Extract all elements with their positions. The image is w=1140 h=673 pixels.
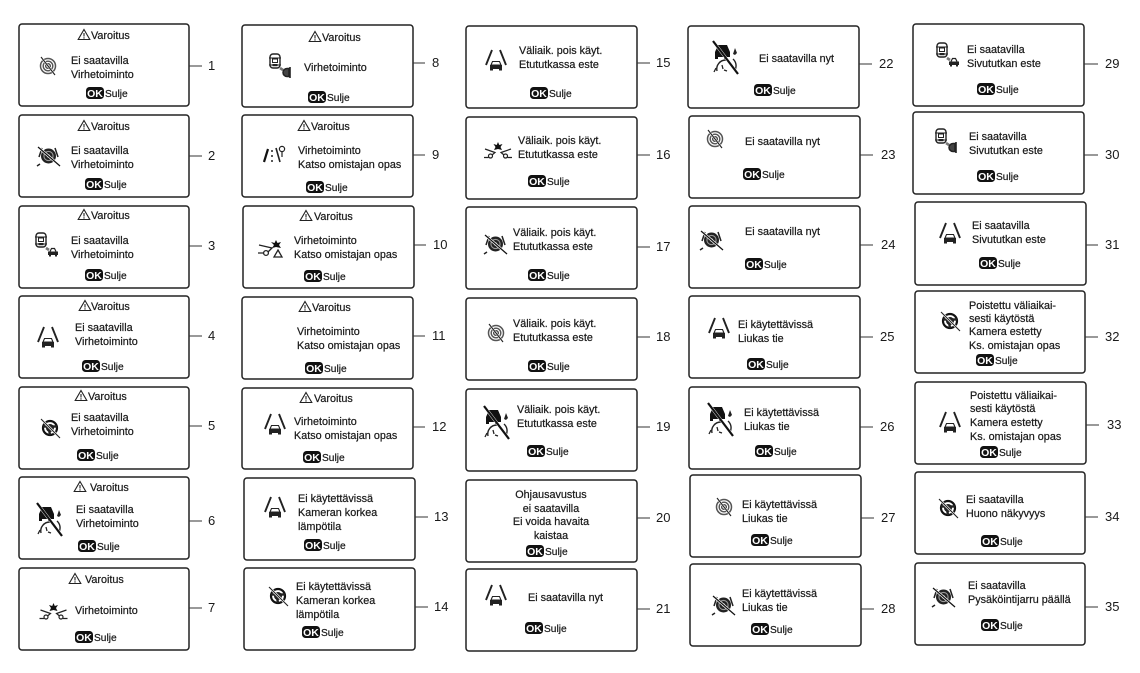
heading: Varoitus: [312, 302, 351, 314]
message: Virhetoiminto: [294, 235, 357, 247]
icon: radar crossed: [716, 498, 732, 516]
message: Liukas tie: [738, 333, 784, 345]
warning panel 30: [913, 112, 1119, 194]
warning panel 8: [242, 25, 439, 107]
warning panel 6: [19, 477, 215, 559]
icon: wheel radar crossed: [712, 596, 735, 615]
number: 31: [1105, 237, 1119, 252]
icon: lane car: [486, 585, 506, 606]
OK button: Sulje: [764, 260, 787, 271]
message: Poistettu väliaikai-: [969, 300, 1056, 312]
OK button: [977, 170, 1019, 183]
warning panel 33: [915, 382, 1121, 464]
warning panel 31: [915, 202, 1119, 285]
message: Virhetoiminto: [297, 326, 360, 338]
icon: steering wheel crossed: [939, 499, 958, 518]
OK button: [85, 178, 127, 191]
message: Liukas tie: [742, 513, 788, 525]
number: 16: [656, 147, 670, 162]
warning panel 22: [688, 26, 893, 108]
warning panel 1: [19, 24, 215, 106]
message: ei saatavilla: [523, 503, 579, 515]
heading: Varoitus: [85, 574, 124, 586]
message: sesti käytöstä: [969, 313, 1034, 325]
message: Ei saatavilla: [71, 235, 129, 247]
OK button: [747, 358, 789, 371]
warning panel 24: [689, 206, 895, 288]
message: Kamera estetty: [969, 326, 1042, 338]
warning panel 7: [19, 568, 215, 650]
OK button: [86, 87, 128, 100]
message: Ei voida havaita: [513, 516, 589, 528]
warning panel 18: [466, 298, 670, 380]
icon: wheel radar crossed: [700, 231, 723, 250]
warning panel 10: [243, 206, 447, 288]
message: Virhetoiminto: [298, 145, 361, 157]
message: Ei saatavilla: [71, 412, 129, 424]
icon: collision: [484, 142, 512, 158]
message: Ei käytettävissä: [742, 499, 817, 511]
icon: collision and triangle: [258, 240, 282, 257]
message: Väliaik. pois käyt.: [513, 227, 596, 239]
OK button: Sulje: [544, 624, 567, 635]
message: kaistaa: [534, 530, 568, 542]
warning panel 5: [19, 387, 215, 469]
OK button: [751, 623, 793, 636]
OK button: [745, 258, 787, 271]
message: Ei saatavilla: [966, 494, 1024, 506]
warning panel 17: [466, 207, 670, 289]
number: 5: [208, 418, 215, 433]
message: Kameran korkea: [298, 507, 377, 519]
message: Ei saatavilla: [71, 55, 129, 67]
heading: Varoitus: [91, 301, 130, 313]
number: 29: [1105, 56, 1119, 71]
number: 21: [656, 601, 670, 616]
message: Liukas tie: [744, 421, 790, 433]
message: Väliaik. pois käyt.: [519, 45, 602, 57]
message: Virhetoiminto: [71, 69, 134, 81]
OK button: Sulje: [996, 85, 1019, 96]
icon: wheel radar crossed: [37, 147, 60, 166]
warning panel 2: [19, 115, 215, 197]
heading: Varoitus: [311, 121, 350, 133]
icon: radar car and lamp: [269, 54, 290, 78]
OK button: Sulje: [998, 259, 1021, 270]
number: 17: [656, 239, 670, 254]
icon: lane car: [265, 497, 285, 518]
message: Sivututkan este: [969, 145, 1043, 157]
message: Ei saatavilla: [967, 44, 1025, 56]
number: 10: [433, 237, 447, 252]
message: Virhetoiminto: [71, 159, 134, 171]
message: Virhetoiminto: [71, 249, 134, 261]
message: Sivututkan este: [972, 234, 1046, 246]
heading: [74, 482, 129, 494]
OK button: Sulje: [996, 172, 1019, 183]
warning panel 11: [242, 297, 446, 379]
message: Ks. omistajan opas: [969, 340, 1061, 352]
message: Ei käytettävissä: [298, 493, 373, 505]
message: Ei saatavilla nyt: [759, 53, 834, 65]
OK button: Sulje: [549, 89, 572, 100]
message: Väliaik. pois käyt.: [517, 404, 600, 416]
warning panel 9: [242, 115, 439, 197]
OK button: [306, 181, 348, 194]
message: Etututkassa este: [518, 149, 598, 161]
OK button: [526, 545, 568, 558]
OK button: [305, 362, 347, 375]
icon: car crossed: [713, 41, 738, 74]
message: Virhetoiminto: [294, 416, 357, 428]
OK button: Sulje: [766, 360, 789, 371]
number: 7: [208, 600, 215, 615]
warning panel 20: [466, 480, 670, 562]
OK button: [304, 539, 346, 552]
message: sesti käytöstä: [970, 403, 1035, 415]
OK button: Sulje: [97, 542, 120, 553]
number: 23: [881, 147, 895, 162]
OK button: Sulje: [327, 93, 350, 104]
OK button: [303, 451, 345, 464]
warning panel 35: [915, 563, 1119, 645]
message: Ei saatavilla: [76, 504, 134, 516]
warning panel 21: [466, 569, 670, 651]
message: Ei saatavilla: [75, 322, 133, 334]
icon: lane car: [265, 414, 285, 434]
OK button: [78, 540, 120, 553]
number: 11: [432, 328, 446, 343]
icon: radar car and lamp: [935, 129, 956, 153]
number: 1: [208, 58, 215, 73]
heading: Varoitus: [88, 391, 127, 403]
heading: Varoitus: [91, 121, 130, 133]
icon: wheel radar crossed: [484, 235, 507, 254]
message: Ei saatavilla: [972, 220, 1030, 232]
OK button: Sulje: [323, 272, 346, 283]
number: 12: [432, 419, 446, 434]
OK button: Sulje: [101, 362, 124, 373]
OK button: [528, 360, 570, 373]
OK button: Sulje: [324, 364, 347, 375]
message: Etututkassa este: [513, 332, 593, 344]
OK button: [979, 257, 1021, 270]
icon: car crossed: [708, 403, 733, 436]
OK button: [980, 446, 1022, 459]
message: Etututkassa este: [513, 241, 593, 253]
number: 13: [434, 509, 448, 524]
OK button: [528, 175, 570, 188]
warning panel 14: [244, 568, 448, 650]
number: 27: [881, 510, 895, 525]
number: 18: [656, 329, 670, 344]
message: Ei käytettävissä: [744, 407, 819, 419]
OK button: [82, 360, 124, 373]
OK button: [77, 449, 119, 462]
OK button: Sulje: [104, 271, 127, 282]
OK button: Sulje: [774, 447, 797, 458]
message: Ei saatavilla: [71, 145, 129, 157]
message: Katso omistajan opas: [294, 249, 398, 261]
warning panel 34: [915, 472, 1119, 554]
warning panel 29: [913, 24, 1119, 106]
OK button: Sulje: [325, 183, 348, 194]
OK button: [75, 631, 117, 644]
message: lämpötila: [296, 609, 339, 621]
warning panel 16: [466, 117, 670, 199]
OK button: Sulje: [546, 447, 569, 458]
message: Poistettu väliaikai-: [970, 390, 1057, 402]
OK button: Sulje: [995, 356, 1018, 367]
OK button: [981, 619, 1023, 632]
message: Ei saatavilla: [969, 131, 1027, 143]
message: Kamera estetty: [970, 417, 1043, 429]
warning panel 13: [244, 478, 448, 560]
warning panel 19: [466, 389, 670, 471]
message: Väliaik. pois käyt.: [513, 318, 596, 330]
number: 3: [208, 238, 215, 253]
OK button: Sulje: [96, 451, 119, 462]
OK button: Sulje: [547, 362, 570, 373]
message: Kameran korkea: [296, 595, 375, 607]
OK button: Sulje: [321, 628, 344, 639]
number: 33: [1107, 417, 1121, 432]
OK button: Sulje: [545, 547, 568, 558]
message: Ei käytettävissä: [742, 588, 817, 600]
number: 25: [880, 329, 894, 344]
message: Virhetoiminto: [75, 336, 138, 348]
number: 19: [656, 419, 670, 434]
message: Etututkassa este: [517, 418, 597, 430]
number: 22: [879, 56, 893, 71]
OK button: Sulje: [547, 177, 570, 188]
warning panel 27: [690, 475, 895, 557]
icon: steering wheel crossed: [941, 312, 960, 331]
warning panel 23: [689, 116, 895, 198]
OK button: Sulje: [773, 86, 796, 97]
number: 30: [1105, 147, 1119, 162]
message: Virhetoiminto: [75, 605, 138, 617]
heading: [69, 574, 124, 586]
warning panel 15: [466, 26, 670, 108]
icon: radar car: [35, 233, 58, 256]
icon: radar crossed: [40, 57, 56, 75]
OK button: [755, 445, 797, 458]
warning panel 26: [689, 387, 894, 469]
OK button: Sulje: [105, 89, 128, 100]
OK button: Sulje: [770, 625, 793, 636]
number: 2: [208, 148, 215, 163]
number: 4: [208, 328, 215, 343]
number: 24: [881, 237, 895, 252]
message: Ei saatavilla nyt: [745, 136, 820, 148]
number: 9: [432, 147, 439, 162]
message: Virhetoiminto: [304, 62, 367, 74]
message: Katso omistajan opas: [298, 159, 402, 171]
OK button: [304, 270, 346, 283]
message: Virhetoiminto: [76, 518, 139, 530]
message: Huono näkyvyys: [966, 508, 1046, 520]
icon: collision: [40, 603, 68, 619]
number: 34: [1105, 509, 1119, 524]
warning panel 28: [690, 564, 895, 646]
icon: lane car: [940, 223, 960, 244]
number: 15: [656, 55, 670, 70]
message: Pysäköintijarru päällä: [968, 594, 1071, 606]
message: Ei saatavilla nyt: [528, 592, 603, 604]
message: Ei käytettävissä: [296, 581, 371, 593]
OK button: [85, 269, 127, 282]
warning panel 12: [242, 388, 446, 469]
icon: lane with pin: [264, 146, 285, 162]
heading: Varoitus: [90, 482, 129, 494]
OK button: Sulje: [104, 180, 127, 191]
OK button: [754, 84, 796, 97]
OK button: Sulje: [770, 536, 793, 547]
OK button: [527, 445, 569, 458]
icon: lane car: [38, 327, 58, 348]
heading: Varoitus: [91, 30, 130, 42]
OK button: Sulje: [323, 541, 346, 552]
heading: Varoitus: [322, 32, 361, 44]
message: Väliaik. pois käyt.: [518, 135, 601, 147]
warning panel 4: [19, 296, 215, 378]
message: Sivututkan este: [967, 58, 1041, 70]
OK button: Sulje: [547, 271, 570, 282]
heading: Varoitus: [314, 393, 353, 405]
message: Liukas tie: [742, 602, 788, 614]
number: 6: [208, 513, 215, 528]
warning panel 32: [915, 291, 1119, 373]
icon: steering wheel crossed: [41, 419, 60, 438]
message: Virhetoiminto: [71, 426, 134, 438]
OK button: [743, 168, 785, 181]
warning panel 3: [19, 206, 215, 288]
icon: car crossed: [484, 406, 509, 439]
message: lämpötila: [298, 521, 341, 533]
icon: radar car and car: [936, 43, 959, 66]
number: 26: [880, 419, 894, 434]
icon: lane car: [709, 318, 729, 338]
number: 32: [1105, 329, 1119, 344]
icon: wheel radar crossed: [932, 588, 955, 607]
OK button: Sulje: [1000, 537, 1023, 548]
message: Ei saatavilla nyt: [745, 226, 820, 238]
icon: radar crossed: [708, 130, 722, 148]
number: 8: [432, 55, 439, 70]
OK button: Sulje: [1000, 621, 1023, 632]
OK button: [528, 269, 570, 282]
icon: radar crossed: [488, 324, 504, 342]
message: Ks. omistajan opas: [970, 431, 1062, 443]
heading: Varoitus: [91, 210, 130, 222]
icon: lane car: [486, 50, 506, 70]
OK button: [302, 626, 344, 639]
OK button: Sulje: [762, 170, 785, 181]
OK button: [977, 83, 1019, 96]
message: Ei käytettävissä: [738, 319, 813, 331]
OK button: Sulje: [322, 453, 345, 464]
warning panel 25: [689, 296, 894, 378]
icon: steering wheel crossed: [269, 587, 288, 606]
OK button: [981, 535, 1023, 548]
heading: Varoitus: [314, 211, 353, 223]
message: Etututkassa este: [519, 59, 599, 71]
OK button: Sulje: [94, 633, 117, 644]
message: Katso omistajan opas: [294, 430, 398, 442]
number: 35: [1105, 599, 1119, 614]
OK button: [976, 354, 1018, 367]
message: Ei saatavilla: [968, 580, 1026, 592]
number: 20: [656, 510, 670, 525]
OK button: [308, 91, 350, 104]
number: 28: [881, 601, 895, 616]
message: Katso omistajan opas: [297, 340, 401, 352]
icon: car crossed: [37, 503, 62, 536]
OK button: [751, 534, 793, 547]
OK button: [530, 87, 572, 100]
OK button: Sulje: [999, 448, 1022, 459]
OK button: [525, 622, 567, 635]
message: Ohjausavustus: [515, 489, 587, 501]
icon: lane car: [940, 412, 960, 432]
number: 14: [434, 599, 448, 614]
